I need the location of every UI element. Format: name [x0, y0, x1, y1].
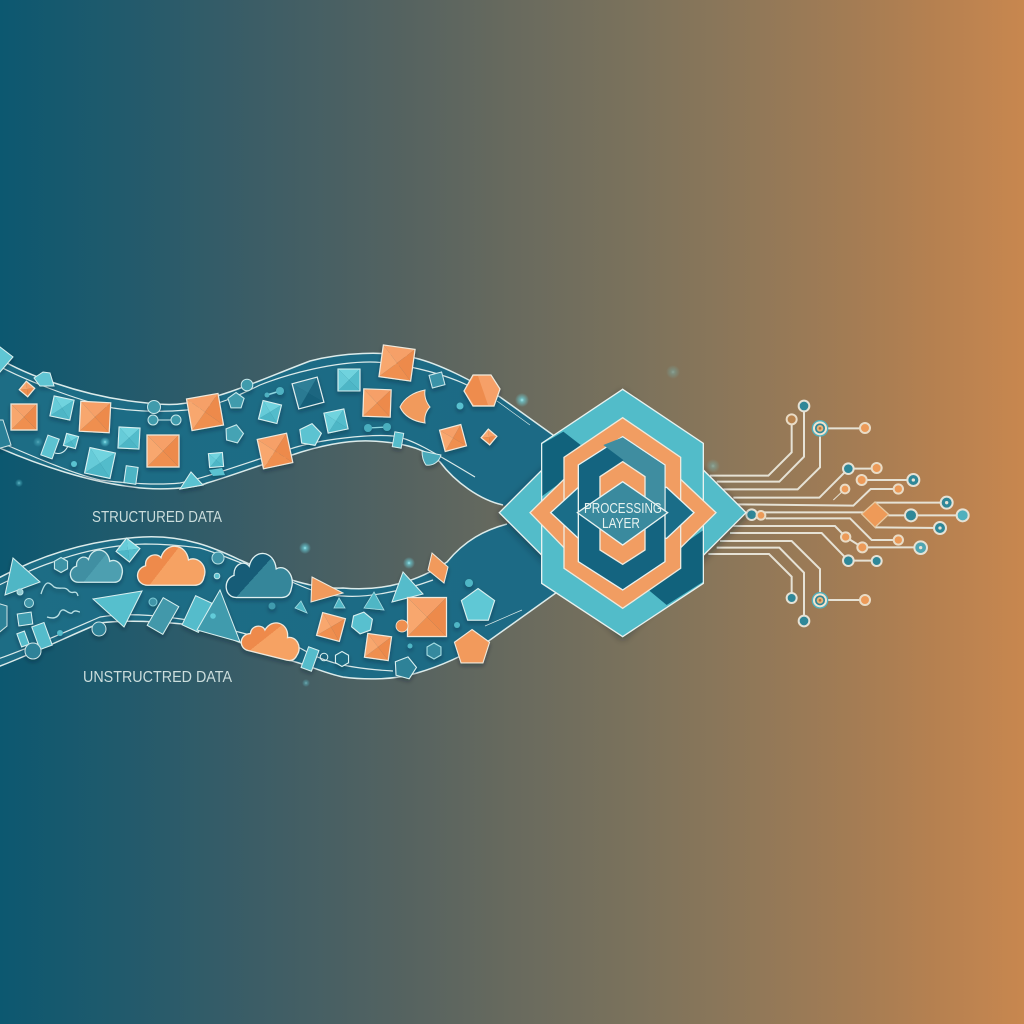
panel: structured data stream band — [0, 353, 560, 525]
large orange square — [408, 598, 446, 636]
dark accent lower right — [649, 531, 703, 605]
orange square — [317, 613, 345, 641]
heading: unstructured data label: UNSTRUCTRED DATA — [83, 669, 232, 686]
teal small square — [63, 433, 79, 449]
node circle — [25, 643, 41, 659]
squiggle lines — [41, 583, 80, 618]
pentagon — [54, 558, 68, 572]
dark hexagon — [578, 437, 665, 590]
processing layer label: PROCESSING — [584, 501, 662, 517]
orange square — [257, 433, 293, 469]
hexagon at edge — [0, 601, 7, 635]
connector link — [55, 446, 68, 453]
teal diamond at edge — [0, 347, 13, 372]
node circles — [17, 552, 224, 608]
rotated rectangle — [182, 596, 212, 632]
ambient glow particles — [15, 365, 720, 687]
teal square — [338, 369, 360, 391]
teal dot — [71, 461, 77, 467]
connector nodes — [264, 387, 284, 398]
rotated rectangle — [147, 598, 179, 634]
teal hexagon — [427, 643, 441, 659]
orange hexagon — [564, 418, 681, 608]
ring centres — [912, 478, 948, 549]
teal dot — [456, 402, 464, 410]
orange square — [11, 404, 37, 430]
orange square — [379, 345, 415, 381]
orange square — [363, 389, 391, 417]
teal rectangle — [41, 435, 59, 459]
processing layer label: LAYER — [602, 516, 640, 532]
orange triangle — [311, 577, 343, 602]
ringed teal nodes — [907, 474, 953, 554]
orange square — [440, 425, 466, 451]
top stream shapes: structured data blocks — [0, 345, 500, 489]
teal triangle — [197, 590, 240, 642]
dark accent upper left — [542, 432, 581, 496]
small orange square — [481, 429, 497, 445]
dark pentagon — [392, 654, 419, 680]
orange hexagon — [464, 375, 500, 406]
teal square — [85, 448, 115, 478]
bottom stream shapes: unstructured data — [0, 538, 495, 680]
teal square — [118, 427, 140, 449]
inner orange hexagon — [600, 462, 645, 564]
orange shield — [400, 390, 430, 423]
processing layer label — [584, 501, 662, 532]
teal pentagon — [223, 422, 245, 444]
lighter hexagon facet — [603, 437, 664, 513]
outer teal hexagon — [542, 389, 703, 637]
small teal square — [429, 372, 445, 388]
teal pentagon — [461, 588, 495, 620]
small teal triangles — [295, 592, 384, 613]
teal rectangle — [124, 466, 138, 484]
node circle — [92, 622, 106, 636]
orange square — [147, 435, 179, 467]
orange diamond — [428, 553, 448, 583]
teal rectangle — [301, 647, 319, 671]
circuit output traces — [708, 401, 969, 626]
large teal triangle — [93, 591, 142, 627]
orange nodes — [757, 414, 903, 605]
hexagon outline — [335, 652, 349, 666]
connected nodes — [364, 423, 391, 432]
teal square — [324, 409, 348, 433]
teal square — [50, 396, 74, 420]
teal square — [258, 400, 282, 424]
dark square — [292, 377, 324, 409]
orange diamond — [530, 479, 716, 548]
orange cloud — [240, 615, 304, 662]
dark cloud — [226, 553, 292, 598]
large target node top — [812, 421, 828, 436]
teal triangle — [180, 472, 203, 489]
dark diamond — [551, 487, 694, 538]
central orange diamond node — [862, 502, 889, 527]
heading: structured data label: STRUCTURED DATA — [92, 509, 222, 526]
teal pentagon — [298, 422, 323, 446]
teal trapezoid — [34, 372, 54, 386]
teal triangle — [5, 558, 40, 595]
teal pentagon with node — [228, 379, 253, 408]
orange pentagon — [454, 630, 490, 663]
teal hexagon — [351, 611, 373, 635]
orange square — [79, 401, 111, 433]
orange circle — [396, 620, 408, 632]
teal nodes — [746, 401, 969, 626]
small ring — [149, 598, 157, 606]
teal cup — [422, 451, 441, 465]
ring outline — [320, 653, 328, 661]
small orange square — [19, 381, 35, 397]
teal dots — [408, 579, 473, 648]
processing layer nested hexagon emblem — [499, 389, 746, 637]
teal small squares — [208, 452, 225, 476]
teal cloud — [70, 550, 122, 582]
teal diamond — [116, 538, 140, 562]
outer teal diamond — [499, 389, 746, 636]
teal dot — [57, 630, 63, 636]
orange square — [364, 633, 392, 661]
panel: unstructured data stream band — [0, 510, 560, 679]
connected nodes — [148, 400, 181, 425]
teal dots — [210, 602, 276, 619]
teal small rectangle — [392, 432, 404, 448]
teal triangle — [392, 572, 423, 602]
large target node bottom — [812, 593, 828, 608]
centre diamond — [577, 482, 668, 545]
teal edge block — [0, 420, 11, 449]
orange cloud — [138, 546, 205, 585]
trace lines — [708, 406, 963, 621]
orange square — [186, 393, 224, 431]
teal rectangles — [17, 612, 52, 649]
